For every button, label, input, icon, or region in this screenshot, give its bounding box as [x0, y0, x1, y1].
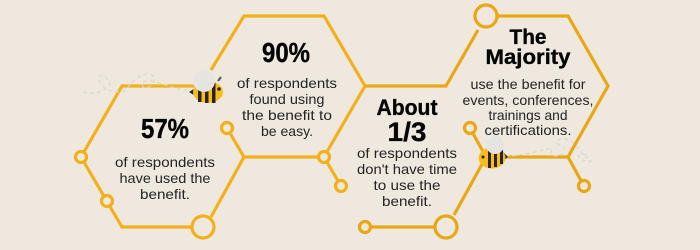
text: 90% description: of respondents — [237, 75, 337, 91]
text: 1/3 description: benefit. — [382, 193, 432, 209]
text: 1/3 description: don't have time — [357, 161, 457, 177]
text: majority description: events, conferences, — [462, 92, 594, 108]
text: 1/3 description: to use the — [374, 177, 441, 193]
hexagon network: left (brighter yellow) — [76, 16, 365, 238]
text: 57% description — [115, 154, 215, 202]
icon: bee right — [478, 136, 508, 168]
text: 1/3 description: of respondents — [357, 145, 457, 161]
text: majority description: use the benefit for — [470, 76, 586, 92]
heading: The Majority: The — [510, 26, 546, 49]
bee flight trail: right — [505, 138, 594, 161]
stat: about 1/3 no time — [357, 95, 457, 209]
heading: About 1/3 — [376, 95, 438, 147]
text: majority description: trainings and — [488, 107, 568, 123]
bee flight trail: left — [83, 74, 190, 93]
heading: The Majority — [486, 26, 571, 69]
stat: 90% found it easy — [237, 37, 337, 139]
text: majority description — [462, 76, 594, 138]
text: 90% description: found using — [250, 91, 324, 107]
text: 90% description: the benefit to — [242, 107, 332, 123]
heading: 57%: 57% — [141, 113, 189, 144]
heading: The Majority: Majority — [486, 46, 571, 69]
heading: About 1/3: 1/3 — [388, 117, 426, 147]
heading: About 1/3: About — [376, 95, 438, 120]
text: 1/3 description — [357, 145, 457, 209]
stat: the majority — [462, 26, 594, 138]
icon: bee left — [189, 70, 223, 103]
text: 90% description — [237, 75, 337, 139]
hexagon network: right (deeper yellow) — [360, 5, 608, 238]
text: 57% description: have used the — [120, 170, 211, 186]
stat: 57% have used — [115, 113, 215, 202]
text: 90% description: be easy. — [261, 123, 313, 139]
text: 57% description: of respondents — [115, 154, 215, 170]
heading: 90%: 90% — [262, 37, 310, 68]
text: 57% description: benefit. — [140, 186, 190, 202]
text: majority description: certifications. — [484, 122, 572, 138]
